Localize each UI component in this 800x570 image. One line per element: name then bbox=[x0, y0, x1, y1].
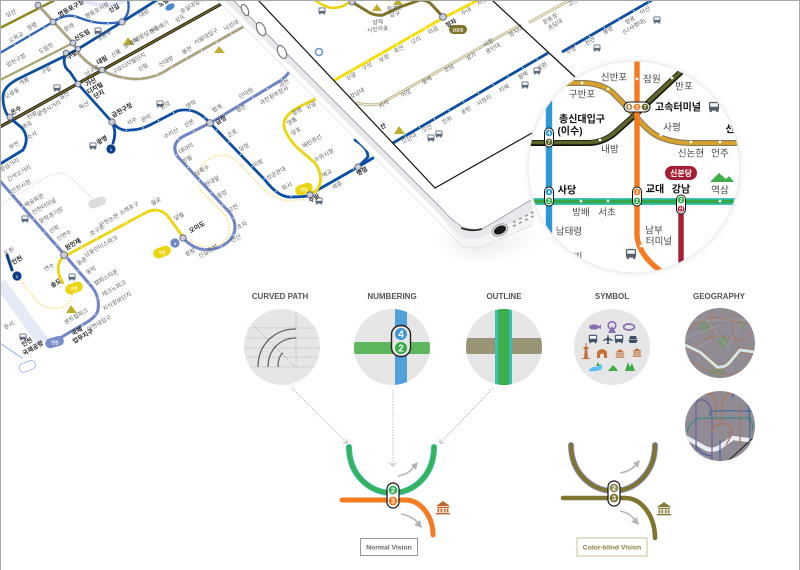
map station labels: 구일 bbox=[39, 64, 53, 76]
map station labels: 고잔 bbox=[226, 202, 240, 214]
map bold station labels: 신길 bbox=[107, 2, 121, 15]
interchange: express terminal: 7 bbox=[644, 105, 646, 111]
interchange: express terminal: 3 bbox=[636, 105, 638, 111]
screen station labels: 어정 bbox=[399, 87, 413, 99]
magnifier labels: 반포 bbox=[675, 82, 693, 92]
map bold station labels: 인천 bbox=[20, 336, 34, 349]
number pill: 2 bbox=[398, 344, 404, 355]
screen station labels: 미금 bbox=[426, 24, 440, 36]
subway map: perspective sheet bbox=[0, 0, 373, 373]
map station labels: 신풍 bbox=[109, 47, 123, 59]
magnifier labels: 내방 bbox=[601, 144, 619, 156]
diagram: color-blind vision bbox=[563, 445, 671, 556]
pills: 인천 bbox=[51, 339, 59, 345]
screen station labels: 쌍용 bbox=[623, 14, 637, 26]
interchange: gyodae: 2 bbox=[636, 199, 638, 205]
map station labels: 관악 bbox=[139, 112, 153, 124]
map station labels: 인천터미널 bbox=[30, 196, 58, 216]
screen bold label: 산 bbox=[379, 121, 388, 131]
map station labels: 신림 bbox=[136, 61, 150, 73]
map station labels: 망포 bbox=[289, 125, 303, 137]
interchange: sadang: 2 bbox=[548, 199, 550, 205]
map station labels: 테크노파크 bbox=[100, 278, 128, 298]
magnifier labels: 잠원 bbox=[643, 74, 661, 86]
map bold station labels: 금천구청 bbox=[110, 101, 134, 119]
line: yellow-olive top left bbox=[0, 0, 55, 28]
screen line: yellow bbox=[335, 0, 490, 80]
magnifier bold labels: 강남 bbox=[672, 182, 690, 196]
screen station labels: 성환 bbox=[535, 60, 549, 72]
screen station labels: 두정 bbox=[565, 45, 578, 56]
map station labels: 대야미 bbox=[177, 141, 195, 156]
pills: 4 bbox=[174, 241, 177, 246]
map station labels: 오류동 bbox=[4, 86, 22, 101]
pills: 분당 bbox=[300, 186, 308, 192]
screen station labels bbox=[344, 0, 652, 146]
map station labels: 인천논현 bbox=[98, 211, 120, 229]
map station labels: 구로디지털단지 bbox=[111, 50, 147, 76]
label: Normal Vision bbox=[366, 544, 412, 552]
map bold station labels: 가산 bbox=[84, 76, 98, 89]
map station labels: 석수 bbox=[125, 115, 139, 127]
map station labels: 남동인더스파크 bbox=[83, 233, 120, 259]
number pill bbox=[392, 326, 410, 356]
map bold station labels: 송도 bbox=[49, 277, 63, 290]
shinbundang tag bbox=[665, 166, 697, 180]
number pill: 4 bbox=[398, 330, 404, 341]
map station labels: 한대앞 bbox=[203, 173, 222, 189]
phone side bezel bbox=[224, 0, 533, 239]
map station labels: 평촌 bbox=[234, 102, 248, 114]
map station labels: 오목교 bbox=[8, 30, 26, 45]
map station labels: 상갈 bbox=[304, 99, 318, 111]
map station labels: 소사 bbox=[25, 129, 39, 141]
map station labels: 초지 bbox=[235, 219, 249, 231]
map station labels: 간석오거리 bbox=[5, 163, 33, 183]
phone shadow bbox=[440, 235, 540, 256]
map station labels: 매탄권선 bbox=[301, 132, 323, 150]
map station labels: 문래 bbox=[62, 21, 76, 33]
label: Color-blind Vision bbox=[583, 544, 641, 552]
magnifier labels: 구반포 bbox=[569, 90, 595, 100]
map station labels: 산본 bbox=[182, 117, 196, 129]
interchange: sadang bbox=[544, 187, 554, 206]
phone screen border bbox=[258, 0, 575, 188]
heading: GEOGRAPHY bbox=[693, 292, 746, 301]
screen station labels: 지석 bbox=[377, 98, 391, 110]
screen station labels: 운동장· bbox=[542, 11, 561, 26]
map station labels: 월곶 bbox=[149, 195, 163, 207]
screen station labels: 진위 bbox=[440, 114, 454, 126]
screen station labels: 삼가 bbox=[464, 50, 478, 62]
map station labels: 인덕원 bbox=[237, 86, 255, 101]
map station labels: 반월 bbox=[180, 153, 194, 165]
map bold station labels: 국제공항 bbox=[21, 339, 45, 357]
screen station labels: 양재 bbox=[372, 17, 384, 27]
number pill: 3 bbox=[612, 494, 616, 503]
screen station labels: 오리 bbox=[409, 34, 423, 46]
map station labels: 의왕 bbox=[251, 157, 265, 169]
map station labels: 달월 bbox=[172, 210, 186, 222]
interchange: express terminal bbox=[624, 102, 650, 112]
panel: outline bbox=[465, 292, 543, 389]
screen line: olive bbox=[352, 0, 443, 17]
map station labels: 연수 bbox=[42, 261, 56, 273]
map bold station labels: 오이도 bbox=[188, 219, 207, 235]
line: mid blue bbox=[0, 0, 129, 53]
magnifier labels bbox=[556, 72, 729, 263]
interchange: gyodae bbox=[632, 187, 642, 206]
phone screen map bbox=[258, 0, 660, 188]
number pill bbox=[387, 483, 399, 508]
yellow dotted lines bbox=[20, 155, 305, 308]
map station labels: 정왕 bbox=[183, 246, 197, 258]
interchange: gangnam: 신 bbox=[679, 205, 684, 213]
magnifier labels: 신반포 bbox=[601, 72, 627, 84]
screen pill label: 신분당 bbox=[452, 26, 464, 32]
magnifier labels: 신논현 bbox=[678, 148, 704, 160]
teal green line bbox=[533, 198, 743, 205]
magnifier labels: 사평 bbox=[663, 122, 681, 134]
map bold station labels: 대림 bbox=[95, 54, 109, 67]
map station labels: 역곡 bbox=[20, 119, 34, 131]
map bold station labels: 구로 bbox=[66, 50, 79, 62]
map station labels: 도림천 bbox=[37, 41, 55, 56]
map station labels: 호구포 bbox=[89, 223, 107, 238]
magnifier labels: 기 bbox=[574, 252, 582, 263]
line: periwinkle bbox=[0, 66, 291, 358]
map station labels: 당정 bbox=[237, 141, 251, 153]
icon: mountains bbox=[66, 37, 225, 313]
screen station labels: 오산대 bbox=[400, 131, 418, 146]
magnifier bold labels: (이수) bbox=[557, 126, 583, 138]
map station labels: 예술회관 bbox=[23, 191, 46, 209]
screen station labels: 시민의숲 bbox=[367, 23, 389, 34]
diagram: normal vision bbox=[342, 447, 450, 556]
line: dark blue one bbox=[0, 0, 373, 270]
map station labels: 영등포 bbox=[95, 27, 114, 43]
interchange: chongshin: 7 bbox=[548, 140, 550, 146]
shinbundang tag: 신분당 bbox=[670, 168, 693, 178]
magnifier bold labels: 선 bbox=[725, 122, 735, 136]
map station labels: 신길온천 bbox=[197, 242, 219, 260]
screen station labels: 죽전 bbox=[392, 43, 406, 55]
map station labels: 캠퍼스타운 bbox=[92, 267, 120, 287]
screen station labels: 동백 bbox=[420, 74, 434, 86]
screen station labels: 입구 bbox=[389, 9, 401, 19]
magnifier bbox=[527, 55, 745, 275]
screen bold label bbox=[379, 17, 458, 131]
grey dotted line bbox=[0, 173, 92, 205]
map station labels: 명학 bbox=[184, 98, 198, 110]
speaker holes bbox=[513, 211, 534, 227]
map station labels: 신연수 bbox=[55, 227, 74, 243]
curves bbox=[258, 329, 296, 367]
dark olive line bbox=[530, 70, 683, 143]
station dots bbox=[580, 77, 721, 247]
screen station labels: 시청· bbox=[482, 36, 497, 49]
magnifier disc bbox=[528, 61, 740, 273]
pills bbox=[12, 144, 314, 373]
screen station labels: 아산 bbox=[638, 4, 652, 16]
pills: 1 bbox=[110, 147, 113, 152]
map bold station labels: 단지 bbox=[92, 88, 106, 101]
map station labels: 센트럴파크 bbox=[62, 306, 90, 326]
map station labels: 개봉 bbox=[17, 75, 31, 87]
map bold station labels: 디지털 bbox=[86, 80, 105, 96]
icon: museum bbox=[657, 502, 671, 515]
map station labels: 매교 bbox=[320, 167, 334, 179]
screen station labels: 송탄 bbox=[459, 104, 473, 116]
map station labels: 화서 bbox=[280, 180, 294, 192]
heading: NUMBERING bbox=[367, 292, 417, 301]
map icons and pills bbox=[7, 2, 361, 373]
map bold station labels: 병점 bbox=[355, 165, 369, 178]
map station labels: 대방 bbox=[137, 7, 151, 19]
screen station labels: 지제 bbox=[497, 82, 511, 94]
icon: green mountain bbox=[710, 173, 734, 182]
map station labels: 양천구청 bbox=[5, 51, 27, 69]
number pill: 3 bbox=[391, 497, 395, 506]
line: dark olive bbox=[0, 3, 223, 128]
map station labels: 수리산 bbox=[162, 125, 181, 141]
magnifier labels: 언주 bbox=[711, 148, 729, 160]
magnifier labels: 방배 bbox=[572, 208, 590, 218]
map station labels: 범계 bbox=[210, 102, 224, 114]
interchange markers bbox=[7, 2, 361, 258]
heading: OUTLINE bbox=[486, 292, 522, 301]
phone body bbox=[217, 0, 800, 248]
map station labels: 선학 bbox=[47, 223, 61, 235]
icon: blue fish bbox=[164, 2, 176, 12]
icon: bus lower bbox=[626, 249, 636, 259]
screen station labels: 송담대 bbox=[546, 17, 564, 32]
map circle: terrain bbox=[685, 308, 755, 378]
map circle: subway overlay bbox=[685, 391, 755, 461]
map station labels: 지식정보단지 bbox=[101, 290, 133, 313]
screen station labels: 보정 bbox=[378, 53, 391, 64]
map station labels: 서울대입구 bbox=[192, 26, 220, 46]
pills: 1 bbox=[16, 274, 19, 279]
magnifier bold labels: 총신대입구 bbox=[559, 112, 605, 126]
interchange: sadang: 4 bbox=[548, 190, 550, 196]
phone bezel edge bbox=[233, 0, 531, 230]
map station labels: 보라매 bbox=[122, 36, 140, 51]
map station labels: 도원 bbox=[2, 245, 16, 257]
line: yellow bbox=[58, 98, 321, 283]
map bold station labels: 온수 bbox=[9, 104, 23, 117]
screen station labels: 평택 bbox=[516, 69, 530, 81]
interchange: chongshin: 4 bbox=[548, 131, 550, 137]
map station labels: 문학경기장 bbox=[37, 205, 65, 225]
map station labels: 양평 bbox=[25, 20, 39, 32]
flow arrows bbox=[620, 463, 637, 522]
screen station labels: 봉명 bbox=[601, 24, 615, 36]
heading: CURVED PATH bbox=[252, 292, 308, 301]
map station labels: 상도 bbox=[173, 12, 187, 24]
screen line: yellow upper left bbox=[315, 0, 348, 8]
magnifier bold labels: 사당 bbox=[558, 184, 576, 196]
screen station labels: (나사렛대) bbox=[621, 16, 647, 36]
pale loop at top bbox=[83, 0, 125, 5]
map station labels: 소래포구 bbox=[118, 199, 141, 217]
map station labels: 군포 bbox=[226, 128, 239, 139]
screen icons bbox=[316, 0, 660, 142]
map station labels: 운서 bbox=[2, 319, 16, 331]
map station labels: 봉천 bbox=[180, 44, 194, 56]
screen station labels: 명지대 bbox=[507, 24, 525, 39]
icons: buses bbox=[20, 28, 322, 340]
map station labels: 광명사거리 bbox=[35, 98, 63, 118]
panel: curved path bbox=[244, 292, 320, 385]
line: beige bbox=[0, 5, 250, 80]
heading: SYMBOL bbox=[595, 292, 629, 301]
phone lower bevel bbox=[441, 212, 533, 248]
number pill bbox=[608, 481, 620, 506]
pills: 수인 bbox=[70, 285, 78, 291]
map bold station labels: 인천 bbox=[10, 254, 24, 267]
interchange: gangnam bbox=[676, 195, 686, 214]
orange line bbox=[342, 500, 433, 535]
map bold station labels bbox=[9, 0, 369, 357]
map station labels: 장승배기 bbox=[148, 18, 170, 36]
map station labels: 인천시청 bbox=[10, 177, 32, 195]
magnifier labels: 남부 bbox=[645, 226, 663, 236]
map bold station labels: 수원 bbox=[307, 192, 321, 205]
map station labels: 과천 bbox=[277, 77, 291, 89]
map station labels: 당산 bbox=[4, 7, 18, 19]
screen line: blue bbox=[393, 0, 652, 143]
magnifier bold labels bbox=[557, 100, 735, 196]
olive curved line bbox=[571, 445, 655, 491]
interchange: gyodae: 3 bbox=[636, 190, 638, 196]
map station labels: 중앙 bbox=[215, 188, 229, 200]
map station labels: 안양 bbox=[158, 99, 172, 111]
map station labels: 세류 bbox=[330, 179, 344, 191]
map station labels: 동막 bbox=[85, 265, 98, 276]
map bold station labels: 업무지구 bbox=[71, 327, 95, 345]
volume buttons bbox=[240, 3, 289, 60]
screen station labels: 서정리 bbox=[475, 93, 493, 108]
map station labels: 상록수 bbox=[193, 162, 212, 178]
map station labels: 신대방삼거리 bbox=[128, 24, 160, 47]
map station labels: 인천대입구 bbox=[85, 313, 113, 333]
icon: bus bbox=[709, 102, 719, 112]
screen station labels: 수내 bbox=[459, 5, 473, 17]
map station labels: 성균관대 bbox=[265, 164, 287, 182]
icon: museum bbox=[436, 501, 450, 514]
gold line bbox=[563, 83, 745, 143]
interchange: gangnam: 2 bbox=[680, 198, 682, 204]
map station labels: 영통 bbox=[285, 115, 299, 127]
map bold station labels: 금정 bbox=[214, 114, 228, 127]
map bold station labels: 국제 bbox=[70, 325, 84, 338]
magnifier labels: 역삼 bbox=[711, 186, 729, 196]
dark transport icons bbox=[589, 334, 638, 344]
map station labels: 천왕 bbox=[25, 109, 39, 121]
phone bbox=[217, 0, 800, 256]
panel: geography bbox=[685, 292, 755, 461]
map bold station labels: 원인재 bbox=[64, 236, 83, 252]
map station labels: 철산 bbox=[57, 89, 71, 101]
map station labels: 독산 bbox=[77, 99, 91, 111]
screen bold label: 정자 bbox=[444, 17, 458, 30]
screen station labels: 신갈 bbox=[344, 70, 358, 82]
magnifier labels: 서초 bbox=[598, 208, 616, 218]
screen station labels: 용인대 bbox=[484, 41, 502, 56]
map station labels bbox=[0, 0, 344, 333]
magnifier bold labels: 교대 bbox=[646, 182, 664, 196]
map station labels: 청명 bbox=[290, 105, 304, 117]
map bold station labels: 광명 bbox=[95, 134, 109, 147]
number pill: 2 bbox=[612, 484, 616, 493]
map bold station labels: 신도림 bbox=[73, 27, 92, 43]
flow arrows bbox=[398, 465, 420, 525]
phone dark corner bbox=[461, 228, 482, 230]
screen station labels: 초당 bbox=[442, 62, 456, 74]
magnifier labels: 남태령 bbox=[556, 226, 582, 238]
magnifier shadow bbox=[527, 60, 741, 274]
map station labels: 동춘 bbox=[75, 255, 89, 267]
map station labels: 영등포시장 bbox=[83, 0, 111, 20]
crimson line bbox=[678, 214, 684, 263]
screen station labels: 강남대 bbox=[348, 86, 366, 101]
interchange: express terminal: 9 bbox=[628, 105, 630, 111]
blue line bbox=[546, 97, 552, 240]
phone outer edge bbox=[217, 0, 533, 248]
dotted arrows bbox=[292, 388, 493, 466]
map station labels: 신대방 bbox=[157, 53, 176, 69]
screen station labels: 청계산 bbox=[386, 3, 404, 13]
orange line bbox=[637, 55, 662, 272]
pills: 수인 bbox=[158, 249, 166, 255]
screen station labels: 구성 bbox=[360, 60, 374, 72]
map station labels: 수원시청 bbox=[313, 146, 335, 164]
interchange: chongshin bbox=[544, 128, 554, 147]
magnifier bold labels: 고속터미널 bbox=[655, 100, 701, 114]
orange landmark icons bbox=[582, 343, 642, 359]
olive line bbox=[563, 498, 655, 538]
screen station labels: 천안 bbox=[583, 35, 597, 47]
map station labels: 낙성대 bbox=[222, 18, 240, 33]
panel: numbering bbox=[354, 292, 432, 389]
screen station labels: 오산 bbox=[420, 122, 434, 134]
screen line: beige bbox=[357, 0, 570, 105]
green curved line bbox=[349, 447, 434, 493]
number pill: 2 bbox=[391, 486, 395, 495]
nature icons bbox=[589, 362, 635, 371]
panel: symbol bbox=[574, 292, 650, 385]
map station labels: 과천정부청사 bbox=[258, 83, 290, 107]
purple icons bbox=[589, 322, 634, 333]
magnifier labels: 터미널 bbox=[646, 236, 672, 248]
map station labels: 남구로 bbox=[83, 62, 102, 78]
map station labels: 부천 bbox=[7, 139, 21, 151]
headphone jack bbox=[490, 221, 510, 239]
map station labels: 안산 bbox=[229, 232, 243, 244]
pale airport band bbox=[0, 283, 43, 342]
